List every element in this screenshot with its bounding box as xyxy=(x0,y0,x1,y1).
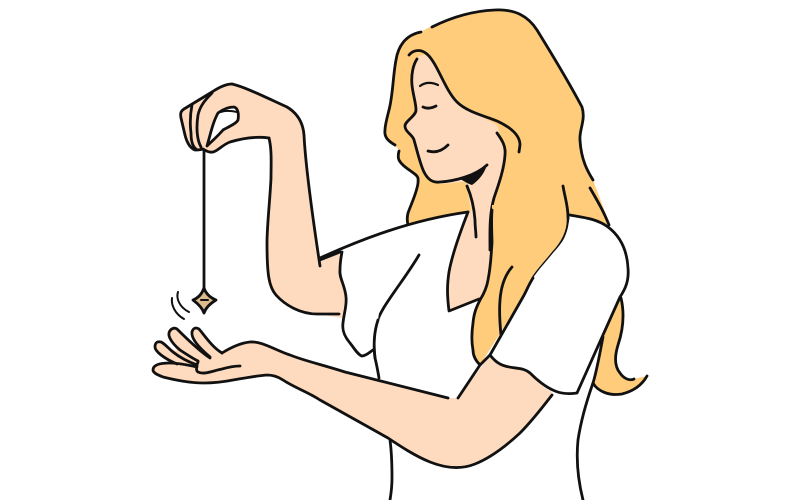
shirt sleeve: raised arm xyxy=(340,233,390,358)
thumb xyxy=(196,362,240,373)
closed eye xyxy=(423,106,436,108)
finger: ring xyxy=(155,342,197,365)
arm outer edge xyxy=(232,84,320,266)
arm inner edge xyxy=(267,138,339,314)
neck lines xyxy=(467,133,505,250)
shirt sleeve: right shoulder xyxy=(490,215,628,394)
motion marks xyxy=(172,292,189,319)
hair: main mass xyxy=(385,10,610,365)
arm top edge xyxy=(222,342,448,398)
hair: front lock over shirt xyxy=(472,186,568,365)
finger: little and palm edge xyxy=(153,363,552,468)
raised arm and pinching hand xyxy=(181,84,345,318)
smile xyxy=(428,145,448,152)
finger: middle xyxy=(169,328,210,361)
finger: index xyxy=(192,328,222,357)
fingers and knuckles xyxy=(181,84,269,152)
pendulum string and weight xyxy=(193,150,216,313)
hairline xyxy=(409,50,520,152)
neck shadow xyxy=(460,165,487,185)
shirt: neckline and body xyxy=(320,195,603,500)
lower arm and open hand xyxy=(153,328,552,468)
face and neck xyxy=(405,50,520,311)
eyebrow xyxy=(420,83,438,86)
hair: back lock at lower right xyxy=(593,296,647,395)
face profile xyxy=(405,59,487,182)
finger gap xyxy=(207,107,238,146)
